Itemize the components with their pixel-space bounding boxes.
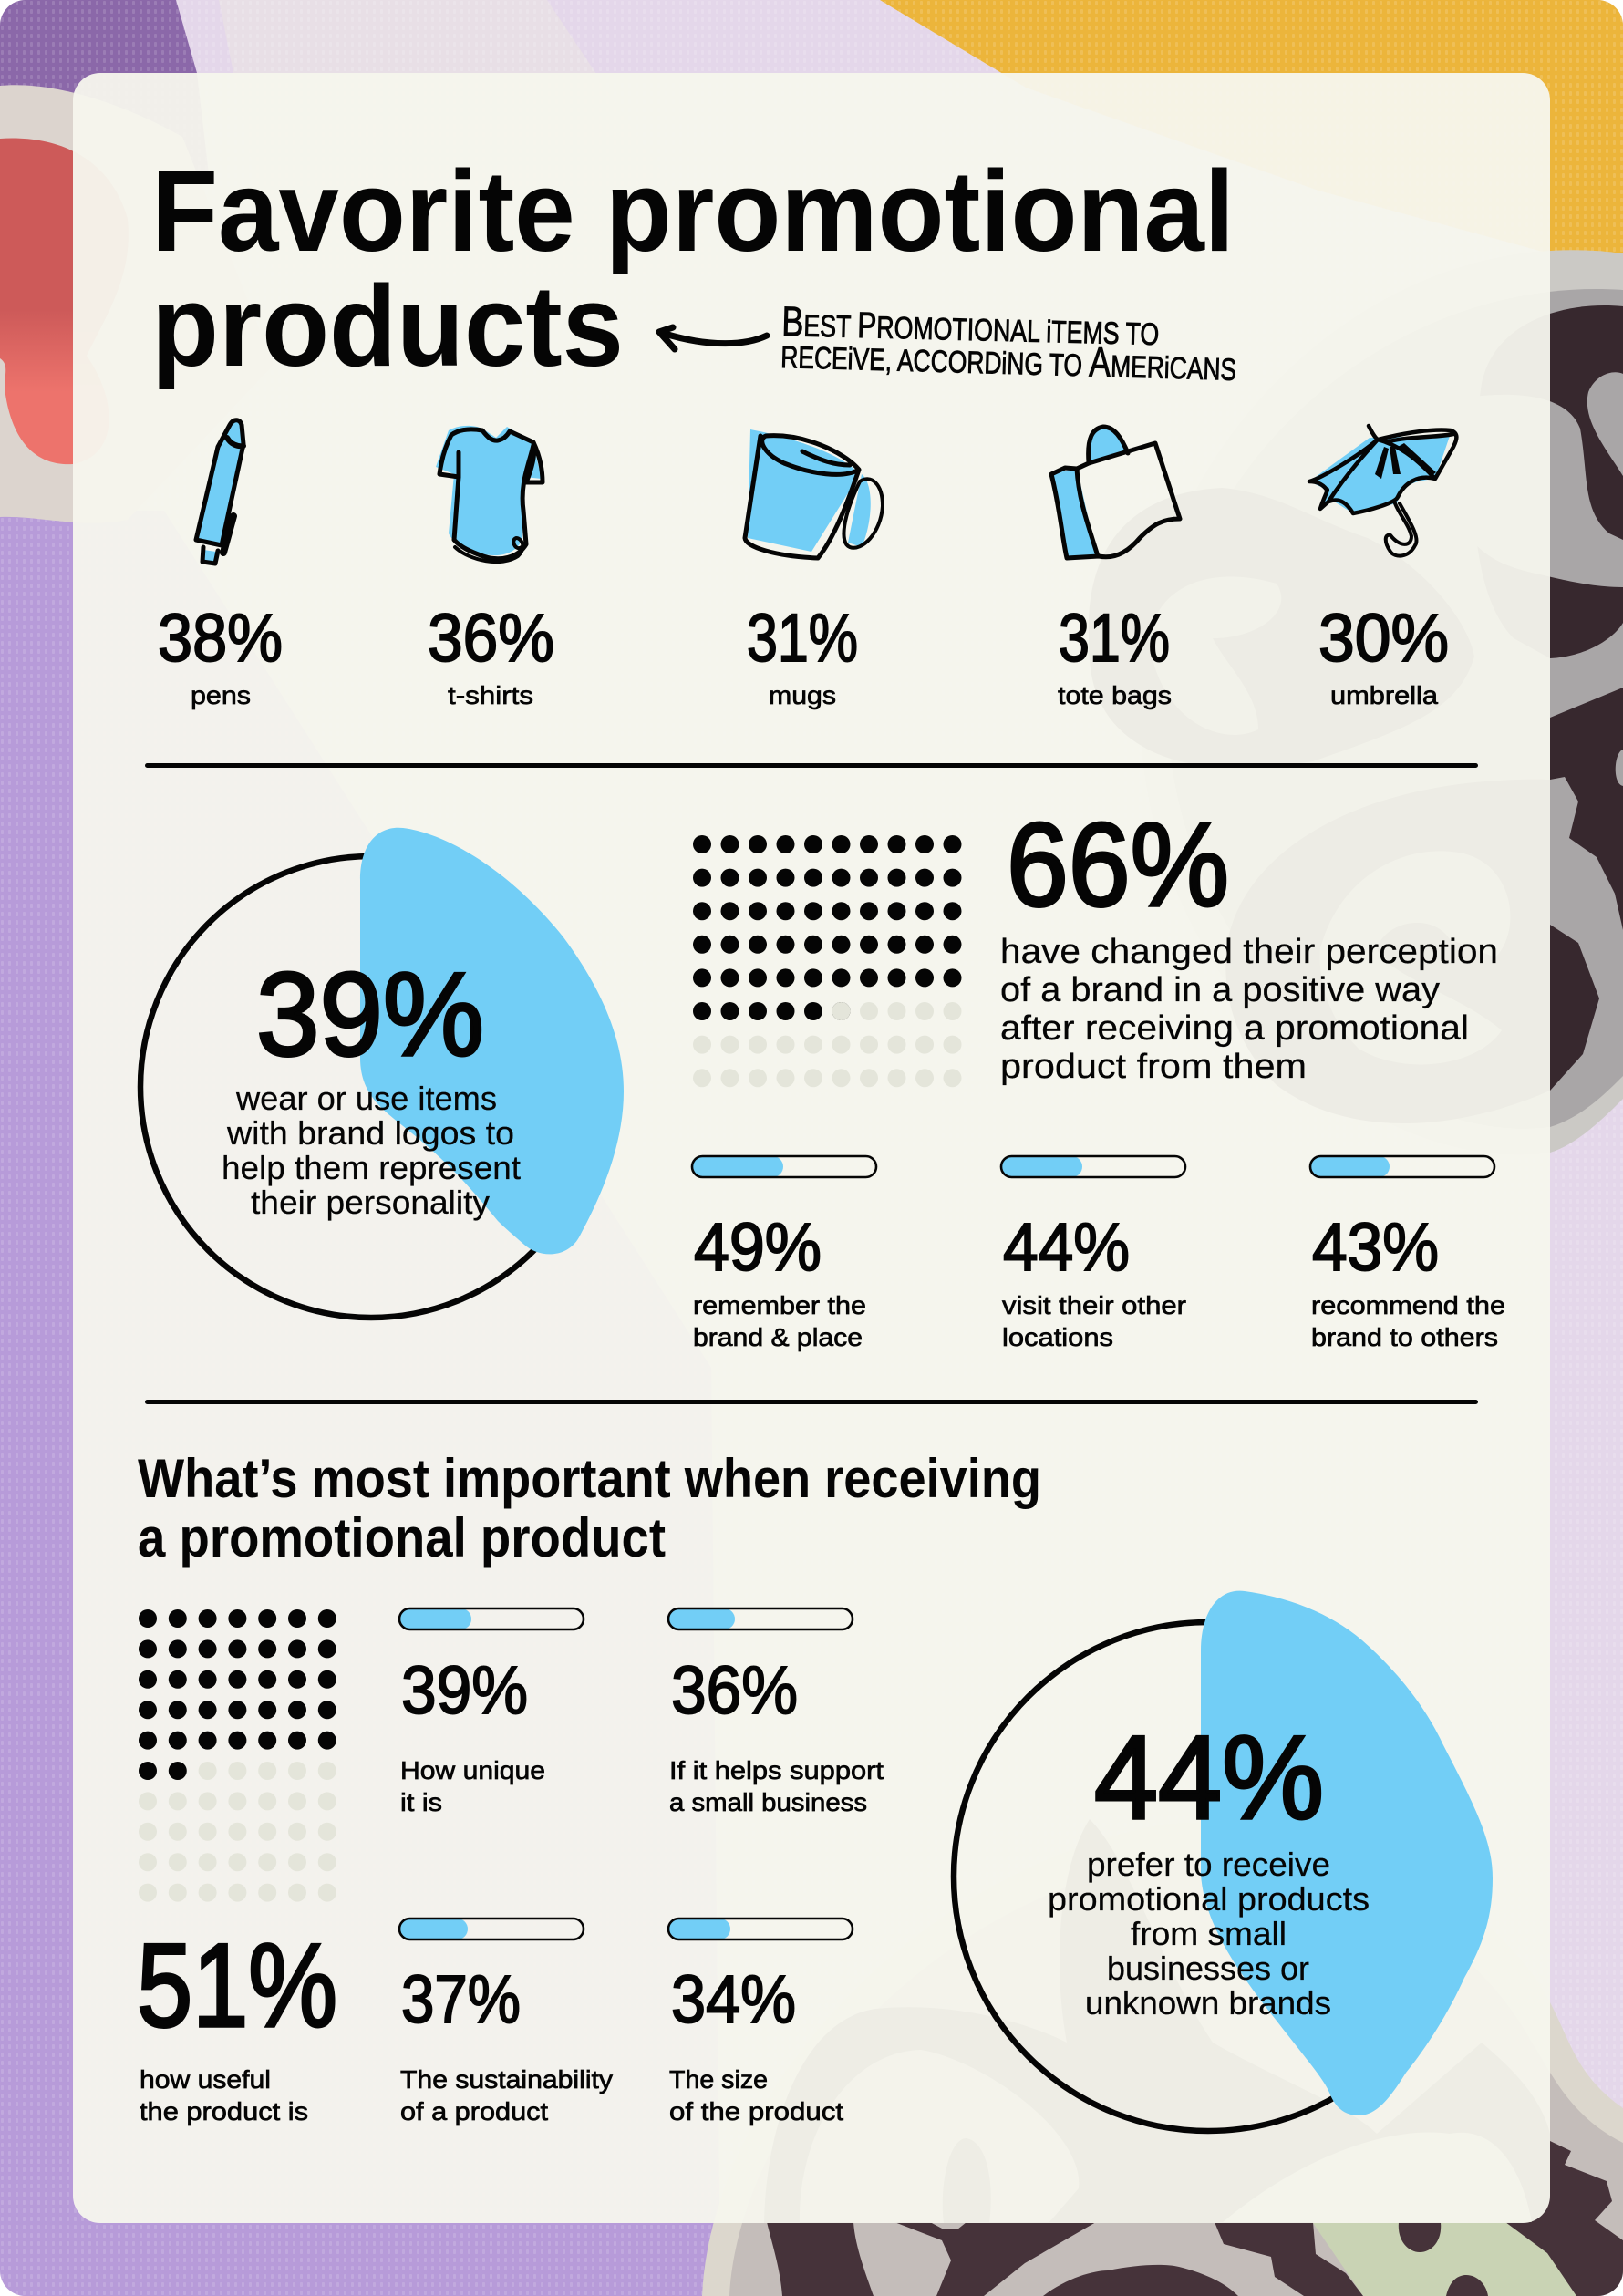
label: mugs: 31%	[747, 600, 858, 676]
label: t-shirts: t-shirts	[448, 681, 533, 709]
label: tote bags: 31%	[1059, 600, 1170, 676]
donut chart: 39%	[140, 828, 624, 1318]
stat: 36% small business: a small business	[669, 1788, 867, 1816]
donut chart: 44%: 44%	[1094, 1711, 1324, 1844]
stat: 51% useful: 51%	[137, 1919, 337, 2052]
stat: 37% sustainability: The sustainability	[400, 2065, 613, 2094]
donut chart: 44%: promotional products	[1048, 1880, 1370, 1918]
stat: 37% sustainability: 37%	[401, 1961, 521, 2037]
stat: 43% recommend: 43%	[1312, 1209, 1439, 1285]
label: t-shirts: 36%	[428, 600, 554, 676]
stat: 34% size: of the product	[669, 2097, 843, 2125]
label: mugs: mugs	[769, 681, 836, 709]
icon: t-shirt	[436, 426, 543, 562]
stat: 34% size: 34%	[671, 1961, 796, 2037]
stat: 34% size: The size	[669, 2065, 768, 2094]
donut chart: 44%	[954, 1591, 1493, 2131]
stat: 66%: have changed their perception	[1000, 933, 1498, 971]
stat: 49% remember: brand & place	[693, 1323, 863, 1351]
donut chart: 39%: help them represent	[222, 1149, 521, 1186]
label: t-shirts	[428, 600, 554, 709]
divider	[145, 1400, 1478, 1404]
icon: umbrella	[1309, 426, 1456, 556]
stat: 66%	[1000, 798, 1498, 1086]
stat: 43% recommend	[1310, 1156, 1505, 1351]
stat: 37% sustainability: of a product	[400, 2097, 548, 2125]
stat: 36% small business	[668, 1608, 884, 1816]
title: Favorite promotional	[151, 147, 1235, 275]
donut chart: 39%: their personality	[251, 1184, 490, 1221]
stat: 49% remember: 49%	[694, 1209, 822, 1285]
donut chart: 39%: 39%	[256, 947, 484, 1081]
title	[151, 147, 1235, 390]
icon: pen	[196, 419, 243, 564]
stat: 44% visit: 44%	[1003, 1209, 1130, 1285]
stat: 66%: 66%	[1007, 798, 1229, 931]
label: umbrella: umbrella	[1330, 681, 1438, 709]
stat: 66%: after receiving a promotional	[1000, 1009, 1469, 1048]
stat: 36% small business: 36%	[671, 1652, 798, 1728]
section: favorite products	[151, 147, 1456, 709]
stat: 66%: of a brand in a positive way	[1000, 971, 1440, 1009]
stat: 36% small business: If it helps support	[669, 1756, 884, 1784]
stat: 49% remember	[692, 1156, 876, 1351]
section: what's most important	[137, 1448, 1493, 2131]
label: tote bags	[1058, 600, 1172, 709]
stat: 66%: product from them	[1000, 1048, 1307, 1086]
handwritten note: BEST PROMOTIONAL iTEMS TO	[781, 297, 1160, 354]
label: pens: pens	[191, 681, 251, 709]
divider	[145, 763, 1478, 768]
donut chart: 39%: wear or use items	[235, 1080, 497, 1117]
stat: 43% recommend: brand to others	[1311, 1323, 1498, 1351]
arrow: hand-drawn pointing to title	[659, 327, 767, 349]
title: products	[151, 262, 624, 390]
stat: 37% sustainability	[399, 1919, 613, 2125]
label: umbrella: 30%	[1318, 600, 1449, 676]
stat: 44% visit	[1001, 1156, 1186, 1351]
handwritten note	[780, 297, 1237, 389]
stat: 39% unique: How unique	[400, 1756, 545, 1784]
donut chart: 39%: with brand logos to	[226, 1114, 514, 1152]
handwritten note: RECEiVE, ACCORDiNG TO AMERiCANS	[780, 329, 1237, 389]
donut chart: 44%: businesses or	[1107, 1950, 1309, 1987]
stat: 44% visit: locations	[1002, 1323, 1113, 1351]
heading: What’s most important when receiving	[138, 1448, 1041, 1509]
stat: 44% visit: visit their other	[1002, 1291, 1186, 1319]
stat: 51% useful: how useful	[140, 2065, 271, 2094]
stat: 49% remember: remember the	[693, 1291, 866, 1319]
donut chart: 44%: prefer to receive	[1087, 1846, 1330, 1883]
label: pens	[158, 600, 283, 709]
label: pens: 38%	[158, 600, 283, 676]
icon: mug	[745, 429, 883, 558]
label: tote bags: tote bags	[1058, 681, 1172, 709]
icon: tote bag	[1051, 427, 1180, 559]
label: umbrella	[1318, 600, 1449, 709]
stat: 43% recommend: recommend the	[1311, 1291, 1505, 1319]
stat: 39% unique: it is	[400, 1788, 442, 1816]
stat: 51% useful: the product is	[140, 2097, 308, 2125]
heading	[138, 1448, 1041, 1568]
stat: 39% unique	[399, 1608, 584, 1816]
dot matrix: 66 percent	[702, 844, 953, 1078]
stat: 39% unique: 39%	[401, 1652, 528, 1728]
dot matrix: 51 percent	[148, 1619, 328, 1893]
donut chart: 44%: from small	[1131, 1915, 1287, 1952]
heading: a promotional product	[138, 1507, 666, 1568]
label: mugs	[747, 600, 858, 709]
stat: 34% size	[668, 1919, 853, 2125]
section: brand perception	[140, 798, 1505, 1351]
donut chart: 44%: unknown brands	[1085, 1984, 1331, 2022]
stat: 51% useful	[137, 1919, 337, 2125]
